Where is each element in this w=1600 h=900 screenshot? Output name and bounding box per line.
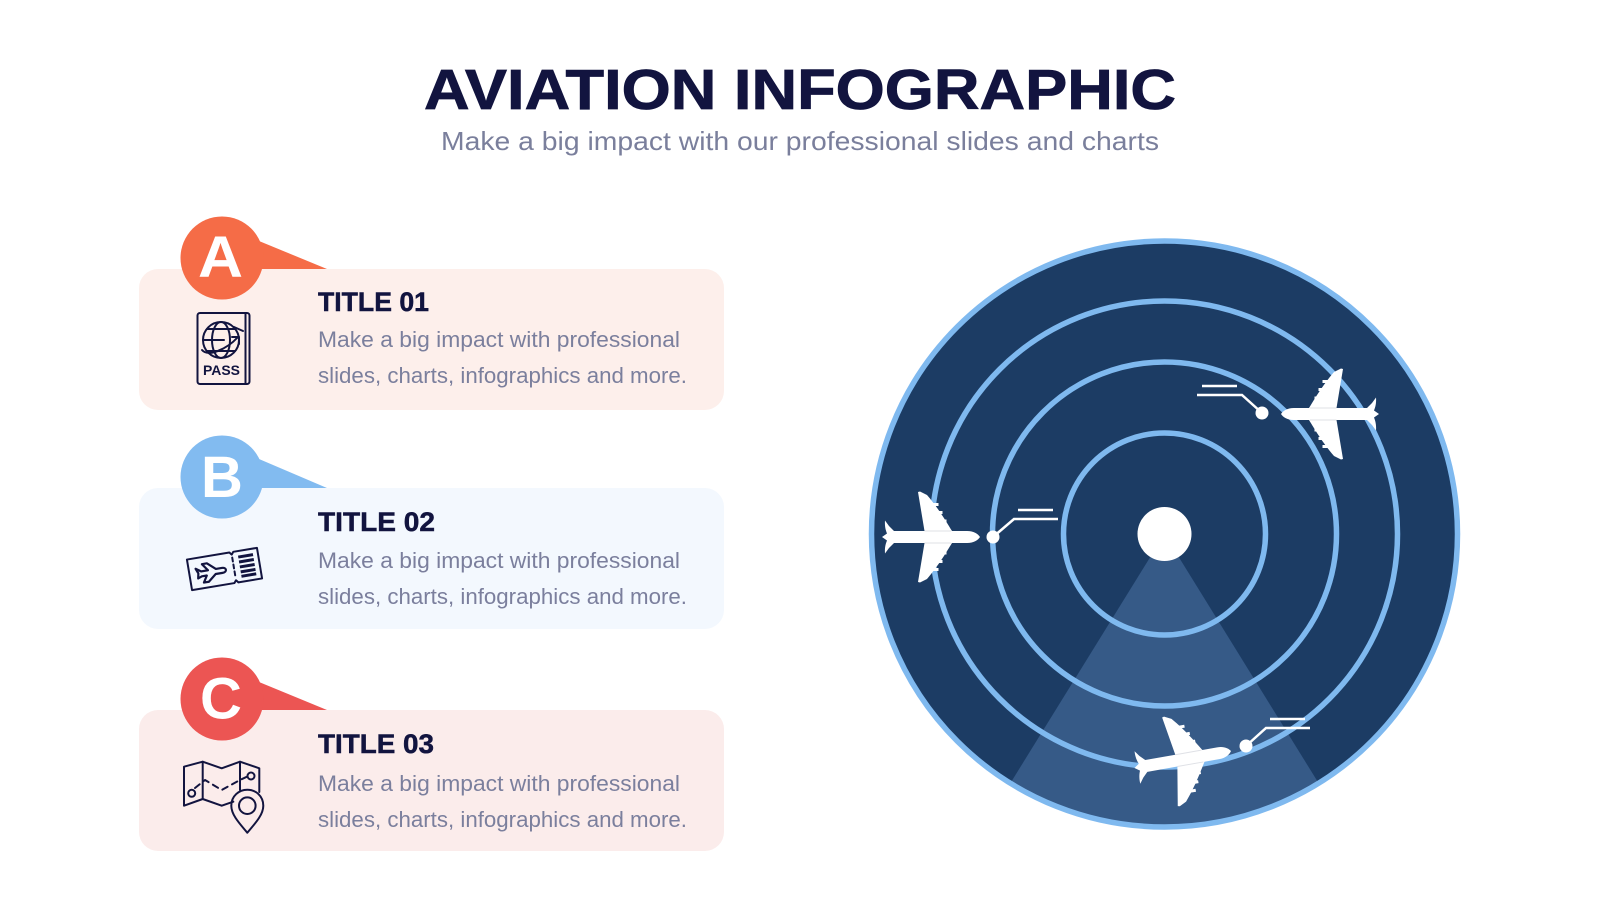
badge A: A <box>198 225 243 290</box>
body text: Make a big impact with professional <box>318 548 680 573</box>
badge B <box>180 436 327 518</box>
heading: TITLE 03 <box>318 729 434 759</box>
plane: upper right <box>1281 368 1379 460</box>
heading: TITLE 01 <box>318 287 429 317</box>
card background <box>139 269 724 410</box>
body text <box>318 548 687 609</box>
callout: left plane <box>986 510 1058 544</box>
radar disc <box>872 241 1458 827</box>
title: AVIATION INFOGRAPHIC <box>424 58 1176 122</box>
subtitle: Make a big impact with our professional slides and charts <box>441 126 1159 156</box>
panel: title 02 card <box>139 436 724 629</box>
chart: radar <box>872 241 1458 842</box>
heading: TITLE 02 <box>318 507 435 537</box>
radar centre point <box>1138 507 1192 561</box>
body text <box>318 771 687 832</box>
card background <box>139 488 724 629</box>
icon: passport: PASS <box>203 362 240 378</box>
icon: passport <box>198 313 250 384</box>
icon: map with pin <box>184 762 263 833</box>
badge A <box>180 216 327 300</box>
radar rings <box>872 241 1458 827</box>
plane: left <box>882 492 980 582</box>
callout: bottom plane <box>1240 719 1310 752</box>
icon: ticket <box>187 548 262 590</box>
radar sweep beam <box>1012 557 1317 824</box>
body text: slides, charts, infographics and more. <box>318 584 687 609</box>
badge C <box>180 658 327 740</box>
body text: slides, charts, infographics and more. <box>318 363 687 388</box>
body text: Make a big impact with professional <box>318 771 680 796</box>
body text: slides, charts, infographics and more. <box>318 807 687 832</box>
panel: title 03 card <box>139 658 724 851</box>
callout: upper right plane <box>1197 386 1268 420</box>
plane: bottom <box>1127 706 1239 813</box>
body text <box>318 327 687 388</box>
badge C: C <box>200 666 242 732</box>
card background <box>139 710 724 851</box>
panel: title 01 card <box>139 216 724 410</box>
body text: Make a big impact with professional <box>318 327 680 352</box>
badge B: B <box>201 445 243 510</box>
